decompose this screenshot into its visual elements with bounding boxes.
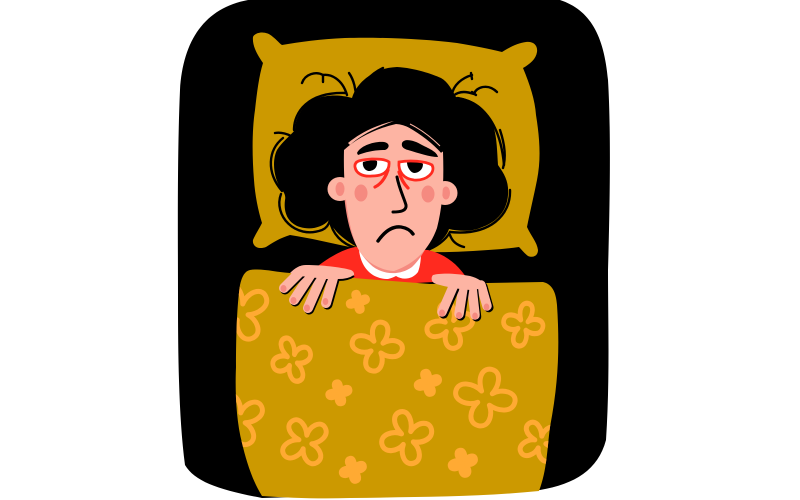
blanket (236, 270, 558, 498)
eye: right (399, 161, 433, 188)
ear: right (432, 181, 458, 205)
hair (271, 67, 510, 251)
bed (178, 0, 610, 498)
nose (393, 177, 406, 212)
finger shadows and fingers (284, 271, 334, 310)
face (344, 124, 443, 271)
mouth (378, 227, 413, 241)
palm (432, 274, 487, 290)
collar (359, 248, 421, 279)
hair mass (274, 67, 508, 250)
ear: left (328, 177, 352, 201)
blanket flowers (236, 286, 550, 484)
hand: left (280, 265, 354, 312)
finger shadows and fingers (442, 285, 489, 317)
eye: left (355, 159, 389, 187)
eyebrows (357, 140, 438, 157)
illustration: sleepless woman in bed (178, 0, 610, 498)
hand: right (432, 274, 489, 320)
cheek: left (354, 184, 368, 202)
palm (290, 265, 354, 279)
stray hair strands (271, 68, 510, 251)
sweater (310, 247, 468, 285)
nails (439, 304, 489, 320)
pillow (253, 32, 540, 257)
nails (280, 285, 328, 312)
chin shadow (343, 180, 443, 273)
cheek: right (422, 186, 434, 202)
hair fringe (348, 121, 442, 152)
